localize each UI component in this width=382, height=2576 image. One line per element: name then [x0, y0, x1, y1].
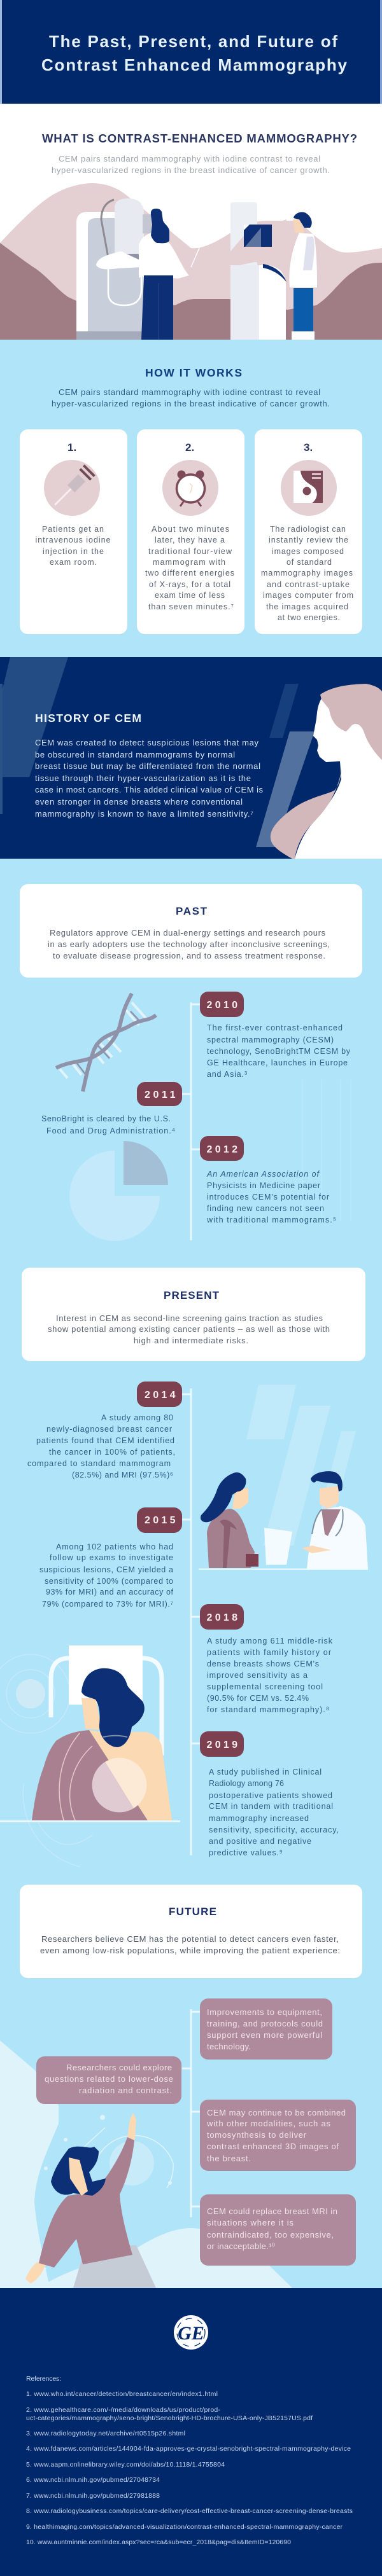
text block: step 3: at two energies.	[278, 613, 340, 622]
badge: 2015: 2015	[145, 1515, 176, 1526]
text block: 2015: suspicious lesions, CEM yielded a	[39, 1565, 173, 1574]
text block: 2012: Physicists in Medicine paper	[207, 1181, 320, 1190]
icon: doctor	[302, 1471, 368, 1569]
badge: 2012: 2012	[206, 1144, 237, 1155]
callout: replace breast MRI	[200, 2194, 356, 2266]
text block: references: 4. www.fdanews.com/articles/144904-fda-approves-ge-crystal-senobright-spectral-mammography-device	[26, 2445, 351, 2453]
callout: equipment improvements: technology.	[207, 2042, 251, 2051]
badge: 2015	[137, 1507, 182, 1533]
text block: history of CEM: breast tissue but may be differentiated from the normal	[35, 761, 260, 771]
text block: 2015: sensitivity of 100% (compared to	[45, 1577, 173, 1586]
text block: past intro: to evaluate disease progression, and to assess treatment response.	[53, 951, 325, 960]
text block: 2019: Radiology among 76	[209, 1779, 284, 1788]
text block: history of CEM: case in most cancers. This added clinical value of CEM is	[35, 785, 264, 794]
text block: history of CEM: even stronger in dense breasts where conventional	[35, 797, 243, 807]
text block: 2010: The first-ever contrast-enhanced	[207, 1023, 343, 1032]
text block: step 3: mammography images	[261, 569, 353, 578]
text block: 2019	[209, 1768, 339, 1857]
text block: 2011: Food and Drug Administration.⁴	[46, 1126, 175, 1135]
callout: combined modalities: tomosynthesis to deliver	[207, 2130, 307, 2140]
logo: GE monogram	[174, 2315, 208, 2350]
text block: step 1	[36, 525, 111, 567]
text block: step 2: traditional four-view	[148, 547, 232, 556]
text block: 2019: and positive and negative	[209, 1837, 311, 1846]
text block: future intro: Researchers believe CEM has the potential to detect cancers even faster,	[41, 1934, 339, 1944]
text block: step 2: of X-rays, for a total	[149, 580, 230, 589]
text block: what is CEM intro: hyper-vascularized regions in the breast indicative of cancer growth.	[52, 165, 330, 175]
text block: step 1: Patients get an	[42, 525, 104, 534]
text block: references: 9. healthimaging.com/topics/advanced-visualization/contrast-enhanced-spectral-mammography-cancer	[26, 2523, 343, 2531]
text block: 2012: introduces CEM's potential for	[207, 1193, 329, 1201]
illustration: patient from behind at mammography unit	[0, 1645, 180, 1867]
step number 1: 1.	[67, 441, 76, 454]
panel: title header	[0, 0, 382, 104]
callout: lower dose research: Researchers could explore	[66, 2063, 172, 2072]
text block: references: 10. www.auntminnie.com/index.aspx?sec=rca&sub=ecr_2018&pag=dis&ItemID=120690	[26, 2538, 291, 2546]
badge: 2010	[200, 992, 244, 1017]
text block: 2015: follow up exams to investigate	[50, 1553, 173, 1562]
text block: 2019: sensitivity, specificity, accuracy,	[209, 1825, 339, 1834]
text block: references: 5. www.aapm.onlinelibrary.wiley.com/doi/abs/10.1118/1.4755804	[26, 2461, 225, 2469]
text block: what is CEM intro: CEM pairs standard mammography with iodine contrast to reveal	[59, 154, 320, 163]
text block: 2010: technology, SenoBrightTM CESM by	[207, 1047, 351, 1056]
callout: lower dose research: questions related to lower-dose	[45, 2074, 173, 2084]
text block: step 1: exam room.	[50, 558, 97, 567]
text block: step 1: intravenous iodine	[36, 536, 111, 544]
text block: references: 6. www.ncbi.nlm.nih.gov/pubmed/27048734	[26, 2476, 160, 2484]
callout: equipment improvements: support even more powerful	[207, 2030, 322, 2040]
text block: past intro	[48, 928, 330, 960]
text block: references: 1. www.who.int/cancer/detection/breastcancer/en/index1.html	[26, 2390, 218, 2398]
badge: 2019: 2019	[206, 1740, 237, 1750]
text block: past intro: Regulators approve CEM in dual-energy settings and research pours	[50, 928, 326, 938]
chart: decorative pie	[69, 1141, 168, 1241]
callout: combined modalities: CEM may continue to be combined	[207, 2108, 346, 2117]
badge: 2011: 2011	[145, 1090, 176, 1100]
text block: 2018: for standard mammography).⁸	[207, 1705, 329, 1714]
callout: equipment improvements: Improvements to equipment,	[207, 2007, 322, 2017]
callout: combined modalities: contrast enhanced 3D images of	[207, 2142, 339, 2151]
timeline: past	[41, 992, 351, 1240]
text block: 2018: patients with family history or	[207, 1648, 331, 1657]
text block: 2014	[27, 1413, 175, 1479]
text block: references	[26, 2375, 353, 2546]
text block: 2018	[207, 1637, 333, 1714]
text block: 2018: supplemental screening tool	[207, 1682, 323, 1691]
text block: step 3: images composed	[272, 547, 344, 556]
text block: history of CEM: tissue through their hyper-vascularization as it is the	[35, 773, 251, 783]
badge: 2012	[200, 1136, 244, 1161]
text block: 2014: (82.5%) and MRI (97.5%)⁶	[72, 1471, 173, 1479]
text block: history of CEM: mammography is known to have a limited sensitivity.⁷	[35, 809, 253, 819]
icon: patient at machine	[96, 209, 189, 340]
text block: step 1: injection in the	[43, 547, 104, 556]
callout: equipment improvements: training, and protocols could	[207, 2019, 323, 2028]
illustration: patient and doctor consultation	[199, 1385, 368, 1570]
text block: step 2: exam time of less	[155, 591, 225, 600]
heading: history of CEM: HISTORY OF CEM	[35, 712, 141, 724]
text block: 2012: An American Association of	[206, 1170, 320, 1179]
card: step 3	[255, 429, 362, 634]
badge: 2018: 2018	[206, 1612, 237, 1623]
text block: history of CEM: be obscured in standard mammograms by normal	[35, 750, 235, 759]
icon: workstation with monitor	[230, 202, 288, 340]
text block: step 3	[261, 525, 353, 622]
callout: lower dose research	[36, 2056, 181, 2104]
text block: step 3: The radiologist can	[270, 525, 346, 534]
panel: what is contrast-enhanced mammography	[0, 104, 382, 340]
text block: 2015	[39, 1542, 174, 1609]
text block: how it works intro: CEM pairs standard mammography with iodine contrast to reveal	[59, 387, 320, 397]
callout: replace breast MRI: situations where it is	[207, 2218, 294, 2227]
callout: combined modalities	[200, 2100, 356, 2171]
text block: 2015: 93% for MRI) and an accuracy of	[46, 1588, 174, 1596]
step number 2: 2.	[185, 441, 194, 454]
heading: how it works: HOW IT WORKS	[145, 366, 242, 379]
card: present intro	[22, 1268, 365, 1361]
icon: image review document	[281, 460, 337, 516]
card: future intro	[20, 1885, 362, 1978]
badge: 2019	[200, 1731, 244, 1757]
text block: history of CEM: CEM was created to detect suspicious lesions that may	[35, 738, 258, 747]
callout: equipment improvements	[200, 1998, 332, 2060]
text block: references: 7. www.ncbi.nlm.nih.gov/pubmed/27981888	[26, 2492, 160, 2500]
callout: replace breast MRI: or inacceptable.¹⁰	[207, 2241, 275, 2251]
badge: 2011	[137, 1082, 182, 1106]
text block: step 3: of standard	[286, 558, 332, 567]
panel: future	[0, 1885, 362, 2288]
panel: history of CEM	[0, 657, 382, 859]
text block: step 2: than seven minutes.⁷	[148, 602, 234, 611]
text block: 2015: Among 102 patients who had	[56, 1542, 173, 1551]
text block: 2019: predictive values.⁹	[209, 1848, 283, 1857]
text block: 2019: A study published in Clinical	[209, 1768, 322, 1776]
heading: future: FUTURE	[169, 1906, 216, 1918]
text block: 2011: SenoBright is cleared by the U.S.	[41, 1114, 171, 1123]
text block: 2010: GE Healthcare, launches in Europe	[207, 1058, 348, 1067]
heading: present: PRESENT	[164, 1289, 220, 1301]
card: step 1	[20, 429, 127, 634]
text block: 2010: and Asia.³	[207, 1070, 247, 1079]
text block: 2018: dense breasts shows CEM's	[207, 1659, 319, 1668]
text block: references: 8. www.radiologybusiness.com/topics/care-delivery/cost-effective-breast-cancer-screening-dense-breasts	[26, 2507, 353, 2515]
text block: 2019: postoperative patients showed	[209, 1791, 332, 1800]
badge: 2014	[137, 1381, 182, 1407]
text block: history of CEM	[35, 738, 264, 819]
text block: 2018: A study among 611 middle-risk	[207, 1637, 333, 1645]
text block: step 3: the images acquired	[266, 602, 348, 611]
card: step 2	[137, 429, 244, 634]
text block: step 2	[145, 525, 234, 611]
panel: how it works	[0, 340, 382, 657]
text block: step 2: two different energies	[145, 569, 234, 578]
panel: past	[20, 884, 362, 1241]
text block: step 2: mammogram with	[153, 558, 225, 567]
text block: future intro	[40, 1934, 340, 1955]
title	[41, 32, 348, 74]
text block: 2018: improved sensitivity as a	[207, 1671, 308, 1680]
icon: mammography machine	[76, 198, 199, 340]
text block: 2014: A study among 80	[101, 1413, 173, 1422]
text block: 2014: compared to standard mammogram	[27, 1459, 171, 1468]
callout: replace breast MRI: contraindicated, too expensive,	[207, 2230, 334, 2240]
text block: how it works intro: hyper-vascularized regions in the breast indicative of cancer growth.	[52, 399, 330, 408]
icon: syringe	[44, 460, 100, 516]
text block: 2011	[41, 1114, 175, 1135]
text block: 2014: patients found that CEM identified	[36, 1436, 174, 1445]
text block: 2014: the cancer in 100% of patients,	[49, 1448, 175, 1457]
text block: 2010	[207, 1023, 351, 1079]
panel: present	[0, 1268, 368, 1867]
text block: what is CEM intro	[52, 154, 330, 175]
badge: 2014: 2014	[145, 1390, 176, 1401]
text block: present intro: show potential among existing cancer patients – as well as those with	[48, 1324, 330, 1334]
icon: alarm clock	[162, 460, 218, 516]
text block: 2018: (90.5% for CEM vs. 52.4%	[207, 1694, 309, 1703]
text block: future intro: even among low-risk populations, while improving the patient experience:	[40, 1946, 340, 1955]
text block: references: References:	[26, 2375, 61, 2383]
text block: present intro: Interest in CEM as second-line screening gains traction as studies	[56, 1313, 323, 1323]
text block: 2012: finding new cancers not seen	[207, 1204, 324, 1213]
panel: footer	[0, 2288, 382, 2576]
icon: DNA helix	[56, 994, 156, 1091]
timeline: future	[182, 2009, 200, 2217]
text block: present intro	[48, 1313, 330, 1345]
illustration: woman reaching upward	[25, 2113, 173, 2288]
callout: combined modalities: with other modalities, such as	[206, 2119, 331, 2128]
heading: past: PAST	[176, 905, 208, 917]
callout: combined modalities: the breast.	[207, 2154, 251, 2163]
illustration: exam room with patient, machine and radiologist	[0, 183, 382, 340]
text block: references: 2. www.gehealthcare.com/-/media/downloads/us/product/prod-	[26, 2406, 220, 2414]
title: Contrast Enhanced Mammography	[41, 55, 348, 74]
icon: radiologist	[289, 212, 317, 340]
text block: 2014: newly-diagnosed breast cancer	[46, 1425, 172, 1434]
illustration: woman silhouette in profile	[271, 684, 382, 859]
text block: how it works intro	[52, 387, 330, 408]
text block: 2010: spectral mammography (CESM)	[207, 1035, 334, 1044]
heading: what is CEM: WHAT IS CONTRAST-ENHANCED MAMMOGRAPHY?	[42, 132, 357, 145]
text block: step 3: images computer from	[263, 591, 353, 600]
callout: lower dose research: radiation and contrast.	[79, 2086, 172, 2095]
card: past intro	[20, 884, 362, 978]
timeline: present	[27, 1381, 339, 1857]
text block: step 3: instantly review the	[269, 536, 348, 544]
text block: step 2: About two minutes	[152, 525, 229, 534]
title: The Past, Present, and Future of	[49, 32, 337, 51]
text block: references: uct-categories/mammography/seno-bright/Senobright-HD-brochure-USA-only-JB52157US.pdf	[26, 2414, 313, 2422]
text block: 2015: 79% (compared to 73% for MRI).⁷	[42, 1600, 173, 1609]
text block: 2012: with traditional mammograms.⁵	[206, 1215, 336, 1224]
text block: 2012	[206, 1170, 336, 1224]
text block: step 2: later, they have a	[155, 536, 225, 544]
text block: step 3: and contrast-uptake	[267, 580, 350, 589]
text block: past intro: in as early adopters use the technology after inconclusive screenings,	[48, 939, 330, 949]
logo: GE monogram: GE	[178, 2323, 204, 2344]
badge: 2018	[200, 1604, 244, 1630]
text block: present intro: high and intermediate risks.	[134, 1336, 248, 1345]
text block: 2019: mammography increased	[209, 1814, 309, 1823]
text block: 2019: CEM in tandem with traditional	[209, 1802, 333, 1811]
icon: patient	[201, 1472, 292, 1568]
badge: 2010: 2010	[206, 1000, 237, 1011]
step number 3: 3.	[304, 441, 313, 454]
text block: references: 3. www.radiologytoday.net/archive/rt0515p26.shtml	[26, 2430, 185, 2437]
callout: replace breast MRI: CEM could replace breast MRI in	[207, 2206, 337, 2216]
